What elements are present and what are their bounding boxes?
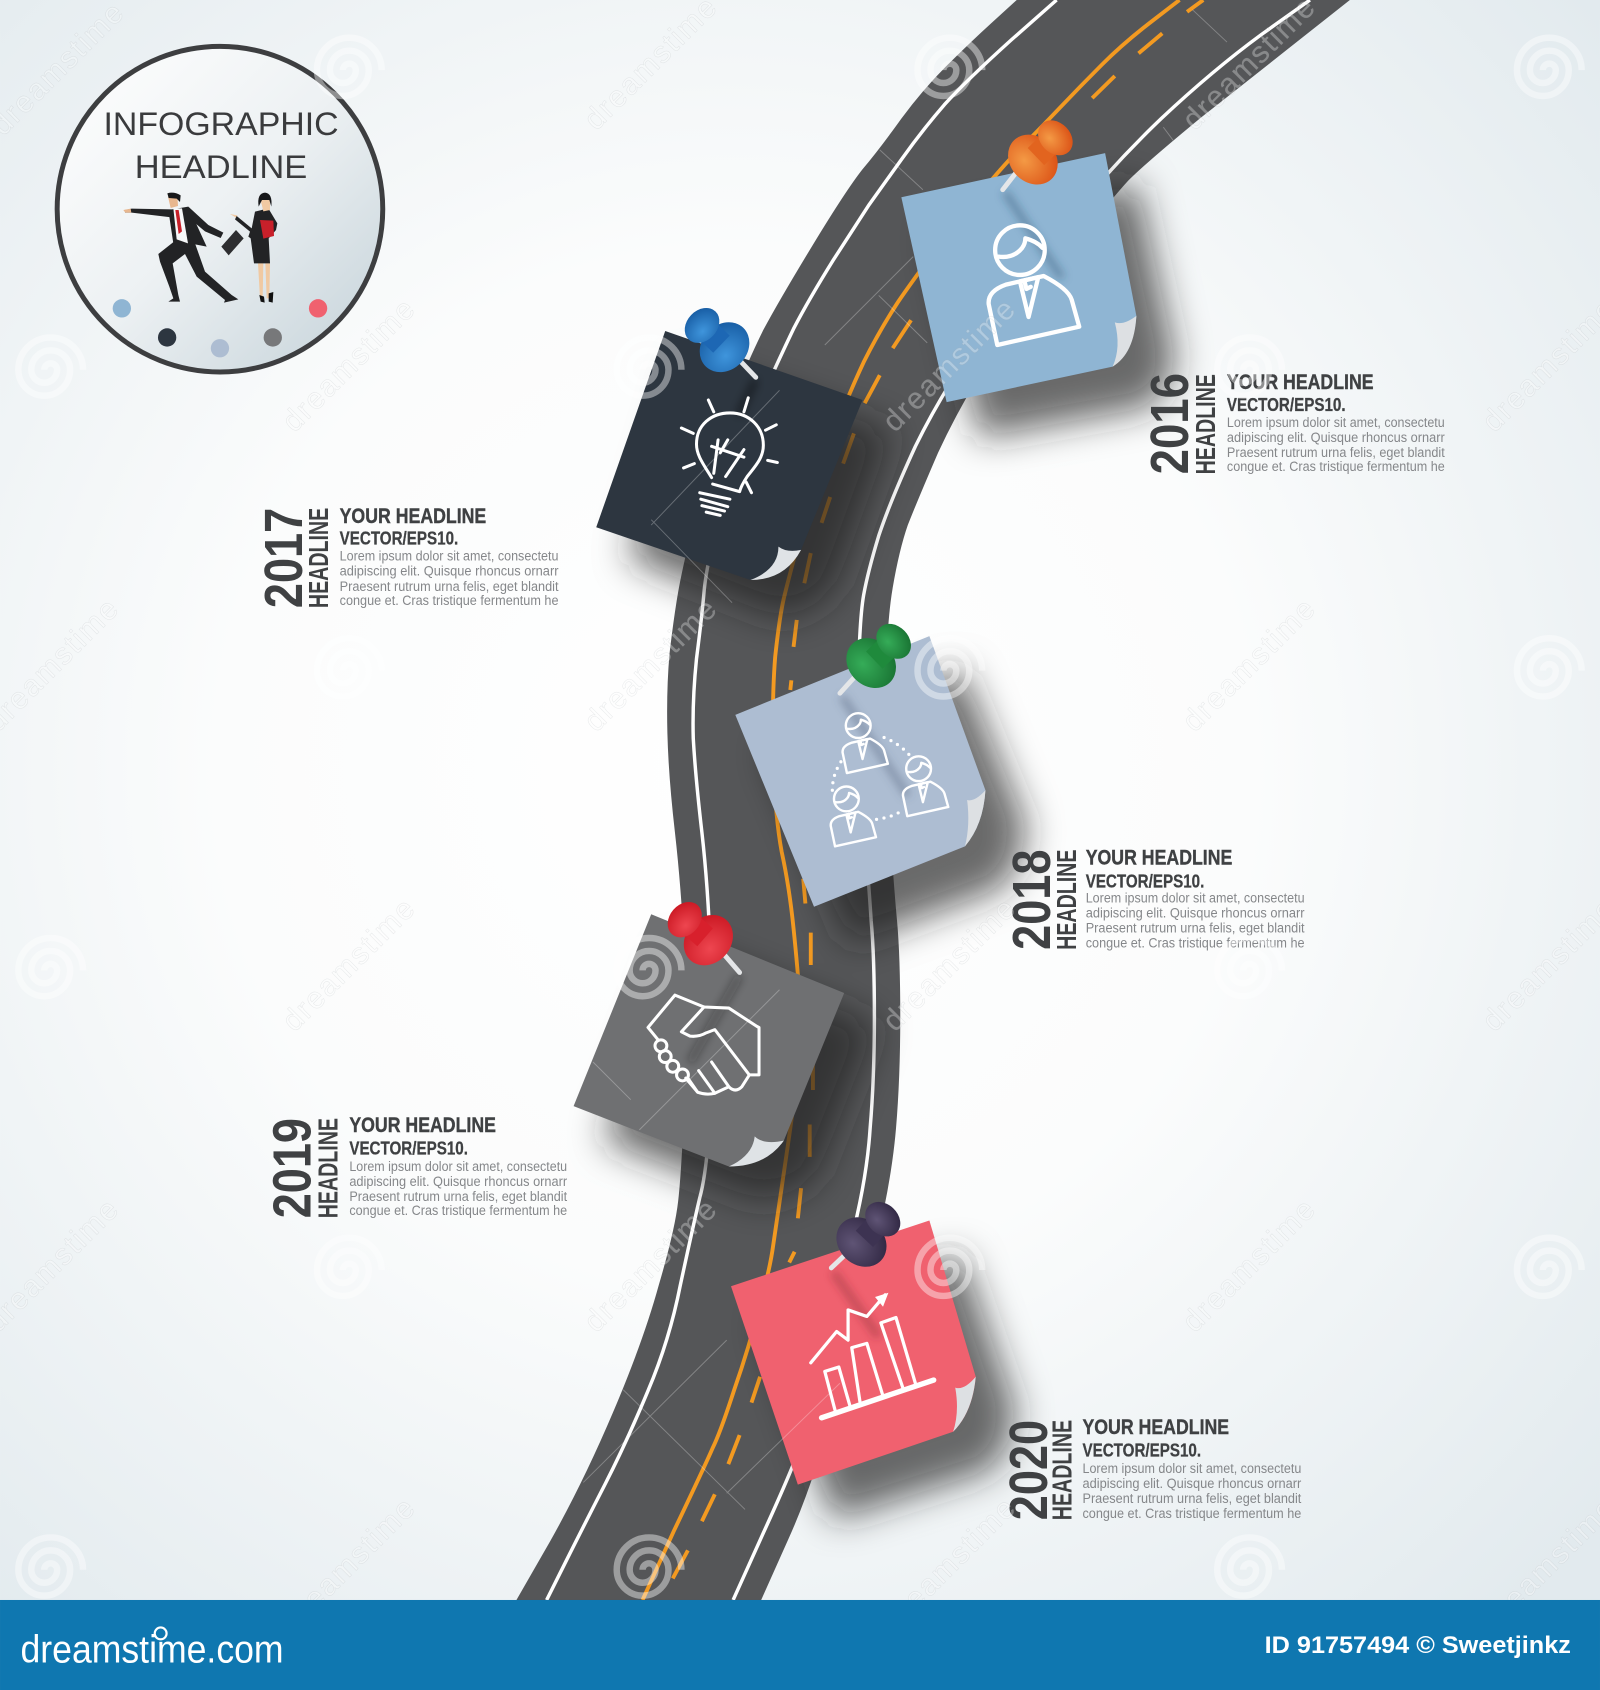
text block: 2016: 2016 — [1140, 373, 1200, 474]
text block: 2019 — [263, 1114, 568, 1218]
text block: 2016: Praesent rutrum urna felis, eget blandit — [1227, 445, 1445, 460]
text block: 2020: YOUR HEADLINE — [1082, 1416, 1229, 1439]
footer logo: dreamstime.com — [20, 1629, 284, 1672]
watermark text: dreamstime — [578, 593, 723, 738]
text block: 2019: adipiscing elit. Quisque rhoncus ornarr — [349, 1174, 568, 1189]
text block: 2019: VECTOR/EPS10. — [349, 1138, 468, 1159]
circle title: INFOGRAPHIC — [104, 106, 339, 142]
text block: 2020: Lorem ipsum dolor sit amet, consectetu — [1082, 1461, 1301, 1476]
watermark text: dreamstime — [1176, 1193, 1322, 1339]
note: 2020 growth — [731, 1190, 976, 1485]
text block: 2016: YOUR HEADLINE — [1227, 371, 1374, 394]
circle title: HEADLINE — [135, 149, 307, 185]
text block: 2017: adipiscing elit. Quisque rhoncus ornarr — [340, 564, 559, 579]
text block: 2018: Lorem ipsum dolor sit amet, consectetu — [1086, 890, 1305, 905]
watermark text: dreamstime — [276, 893, 421, 1038]
footer credit: ID 91757494 © Sweetjinkz — [1265, 1633, 1571, 1659]
text block: 2018: 2018 — [1002, 850, 1062, 950]
page curl — [1113, 316, 1136, 367]
icon: handshake — [648, 995, 759, 1094]
pin: red — [656, 889, 743, 975]
pin shadow — [1005, 192, 1062, 278]
circle title — [104, 106, 339, 185]
pin: orange — [998, 108, 1085, 195]
pin shadow — [833, 1272, 879, 1337]
text block: 2016 — [1140, 371, 1445, 474]
pin shadow — [739, 380, 756, 415]
text block: 2019: 2019 — [263, 1118, 323, 1218]
note paper — [735, 636, 985, 907]
icon: dotted connections — [832, 737, 911, 819]
page curl — [953, 1377, 976, 1432]
footer bar — [0, 1600, 1600, 1690]
note: 2017 idea — [596, 296, 863, 580]
text block: 2017: Praesent rutrum urna felis, eget blandit — [340, 579, 559, 594]
road left white line — [547, 0, 1057, 1600]
watermark text: dreamstime — [876, 893, 1022, 1038]
pin: purple — [826, 1190, 913, 1277]
text block: 2018: congue et. Cras tristique fermentum he — [1086, 936, 1305, 951]
note: 2016 person — [901, 108, 1136, 402]
road right white line — [733, 0, 1310, 1600]
text block: 2019: YOUR HEADLINE — [349, 1114, 496, 1137]
text block: 2017: Lorem ipsum dolor sit amet, consectetu — [340, 549, 558, 564]
text block: 2020: Praesent rutrum urna felis, eget blandit — [1082, 1491, 1302, 1506]
text block: 2019: HEADLINE — [312, 1118, 343, 1218]
watermark text: dreamstime — [276, 1492, 421, 1637]
text block: 2020: adipiscing elit. Quisque rhoncus ornarr — [1082, 1476, 1302, 1491]
pin: green — [836, 611, 923, 698]
page curl — [729, 1136, 784, 1167]
watermark text: dreamstime — [1176, 593, 1322, 738]
page curl — [965, 790, 985, 846]
text block: 2016: Lorem ipsum dolor sit amet, consectetu — [1227, 415, 1445, 430]
icon: team of three — [831, 713, 948, 846]
icon: footer logo spiral — [155, 1627, 167, 1639]
note paper — [901, 153, 1136, 402]
text block: 2016: VECTOR/EPS10. — [1227, 394, 1346, 415]
text block: 2020: congue et. Cras tristique fermentum he — [1082, 1506, 1301, 1521]
colour dots — [113, 299, 327, 357]
text block: 2020: HEADLINE — [1047, 1420, 1078, 1520]
text block: 2019: congue et. Cras tristique fermentum he — [349, 1203, 567, 1218]
text block: 2017: 2017 — [254, 508, 314, 608]
note: 2019 handshake — [574, 889, 844, 1167]
text block: 2016: HEADLINE — [1190, 374, 1221, 474]
watermark text: dreamstime — [578, 1193, 723, 1339]
text block: 2019: Lorem ipsum dolor sit amet, consectetu — [349, 1159, 567, 1174]
business people illustration — [123, 193, 277, 303]
watermark text: dreamstime — [876, 1492, 1022, 1637]
page curl — [750, 547, 801, 580]
pin shadow — [690, 976, 740, 1062]
text block: 2017 — [254, 505, 559, 608]
note paper — [574, 914, 844, 1167]
text block: 2016: adipiscing elit. Quisque rhoncus ornarr — [1227, 430, 1445, 445]
note paper — [596, 331, 863, 580]
text block: 2018: VECTOR/EPS10. — [1086, 870, 1204, 891]
text block: 2020 — [999, 1416, 1302, 1521]
text block: 2017: VECTOR/EPS10. — [340, 527, 458, 548]
icon: person — [989, 225, 1079, 345]
icon: light bulb — [681, 398, 777, 515]
road dashed orange line — [673, 0, 1203, 1578]
pin shadow — [842, 696, 908, 796]
road — [516, 0, 1350, 1600]
circle badge — [57, 46, 383, 372]
text block: 2020: 2020 — [999, 1420, 1059, 1520]
watermark text: dreamstime — [876, 293, 1022, 438]
icon: bar chart with arrow — [811, 1293, 934, 1418]
text block: 2019: Praesent rutrum urna felis, eget blandit — [349, 1189, 567, 1204]
road solid orange line — [643, 0, 1180, 1600]
text block: 2020: VECTOR/EPS10. — [1082, 1440, 1201, 1461]
note shadows — [604, 183, 1175, 1520]
note: 2018 team — [735, 611, 985, 907]
text block: 2018: HEADLINE — [1051, 850, 1082, 950]
text block: 2018: adipiscing elit. Quisque rhoncus ornarr — [1086, 906, 1305, 921]
pin: blue — [672, 296, 760, 382]
text block: 2017: HEADLINE — [303, 508, 334, 608]
watermark text: dreamstime — [276, 293, 421, 438]
headline circle — [57, 46, 383, 372]
road surface — [516, 0, 1350, 1600]
note paper — [731, 1220, 976, 1485]
text block: 2018: Praesent rutrum urna felis, eget blandit — [1086, 921, 1305, 936]
text block: 2016: congue et. Cras tristique fermentum he — [1227, 459, 1445, 474]
text block: 2018 — [1002, 847, 1305, 951]
text block: 2017: congue et. Cras tristique fermentum he — [340, 593, 558, 608]
text block: 2017: YOUR HEADLINE — [340, 505, 486, 528]
text block: 2018: YOUR HEADLINE — [1086, 847, 1232, 870]
